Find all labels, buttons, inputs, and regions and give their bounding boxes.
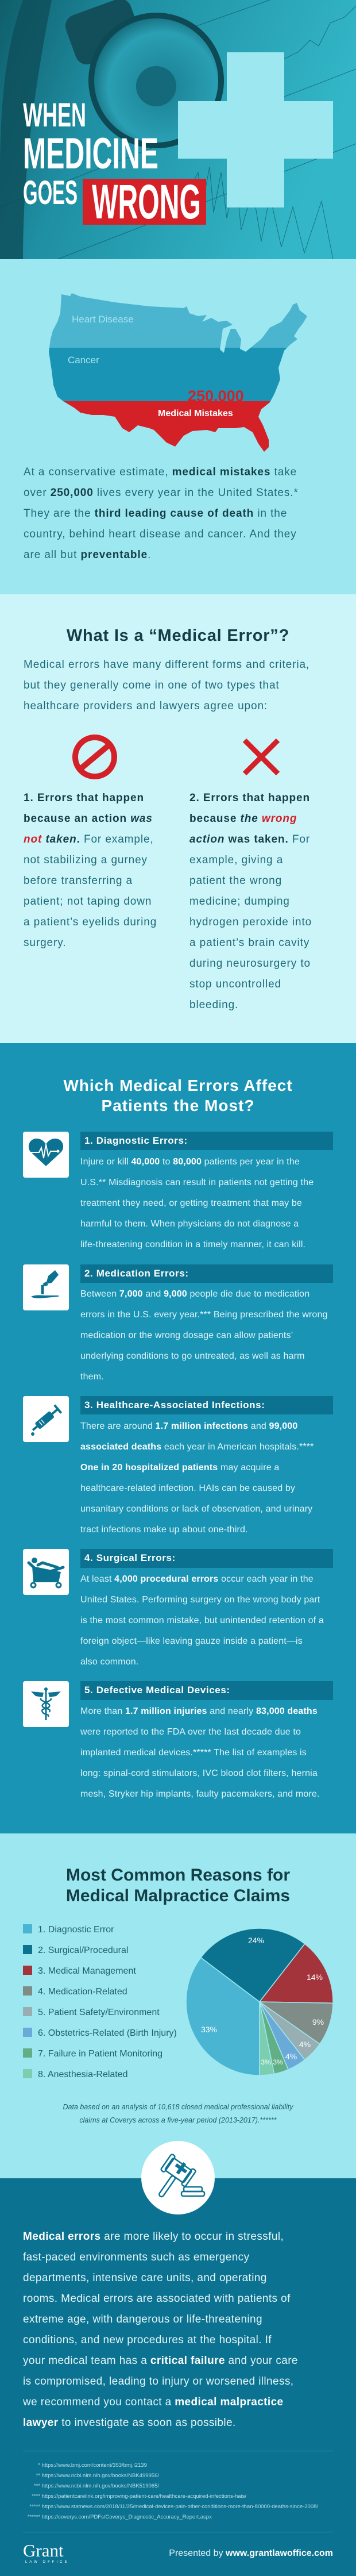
pie chart: 24% [248,1936,264,1945]
text [80,1706,320,1799]
caption: claims at Coverys across a five-year period (2013-2017).****** [79,2116,277,2124]
title: GOES [23,174,78,212]
text block: type 1: 1. Errors that happen [24,792,144,804]
text block: type 2: patient the wrong [189,875,282,887]
text [80,1574,324,1667]
text: errors in the U.S. every year.*** Being prescribed the wrong [80,1310,328,1320]
header bar: 2. Medication Errors: [84,1268,189,1279]
pie chart: 14% [307,1973,323,1982]
icon: gavel circle [141,2141,215,2214]
icon: medical cross [178,52,333,207]
text block: conclusion: fast-paced environments such as emergency [23,2251,249,2263]
legend: 7. Failure in Patient Monitoring [38,2049,162,2059]
footnotes: https://www.ncbi.nlm.nih.gov/books/NBK519065/ [42,2483,159,2489]
text: also common. [80,1657,138,1667]
heading [63,1076,293,1114]
caption [63,2103,293,2124]
legend: 8. Anesthesia-Related [38,2070,128,2079]
header bar [80,1681,333,1700]
text block: type 1: patient; not taping down [24,895,152,908]
footnotes: ***** [30,2504,40,2510]
legend: 1. Diagnostic Error [38,1925,114,1935]
panel: malpractice claims [0,1833,356,2178]
heading: What Is a “Medical Error”? [67,626,289,645]
title [23,101,206,225]
header bar [80,1396,333,1414]
text: life-threatening condition in a timely manner, it can kill. [80,1240,305,1249]
item 2: medication errors [23,1264,333,1382]
text: More than 1.7 million injuries and nearly 83,000 deaths [80,1706,318,1716]
panel: map section background [0,259,356,594]
text block: intro statistic: are all but preventable. [24,549,151,561]
text block: conclusion: rooms. Medical errors are associated with patients of [23,2293,291,2305]
text block: type 1: not stabilizing a gurney [24,854,148,866]
heading: Most Common Reasons for [66,1866,290,1885]
text block: conclusion [23,2231,298,2429]
text: unsanitary conditions or lack of observation, and urinary [80,1504,312,1514]
text block: intro: but they generally come in one of two types that [24,679,280,691]
text: harmful to them. When physicians do not diagnose a [80,1219,299,1229]
text block: intro statistic [24,466,299,561]
footnotes: https://patientcarelink.org/improving-patient-care/healthcare-acquired-infections-hais/ [42,2493,246,2500]
text block: conclusion: we recommend you contact a medical malpractice [23,2396,284,2408]
text: is the most common mistake, but unintended retention of a [80,1616,324,1625]
pie chart [186,1929,333,2075]
text: U.S.** Misdiagnosis can result in patients not getting the [80,1178,314,1187]
text block: conclusion: extreme age, with dangerous or life-threatening [23,2313,262,2325]
text: medication or the wrong dosage can allow patients’ [80,1331,293,1340]
map: US causes of death: Medical Mistakes [158,409,233,418]
text block: type 1: a patient’s eyelids during [24,916,157,928]
item 5: defective medical devices [23,1681,333,1799]
footer credit: Presented by www.grantlawoffice.com [169,2548,333,2558]
text: At least 4,000 procedural errors occur each year in the [80,1574,314,1584]
icon: prohibition sign [72,735,117,779]
icon: bottle pouring [23,1264,69,1310]
pie chart: 33% [201,2025,217,2034]
panel: what is a medical error [0,594,356,1043]
text block: type 2: because the wrong [189,813,297,825]
text block: conclusion: lawyer to investigate as soon as possible. [23,2417,236,2429]
text: underlying conditions to go untreated, as well as harm [80,1351,305,1361]
text: Between 7,000 and 9,000 people die due to medication [80,1289,309,1299]
text block: intro: Medical errors have many different forms and criteria, [24,659,309,671]
text: them. [80,1372,104,1382]
text block: intro statistic: At a conservative estimate, medical mistakes take [24,466,297,478]
text block: type 2: medicine; dumping [189,895,290,908]
pie chart: 4% [285,2052,297,2061]
text [80,1289,328,1382]
text block: type 1: before transferring a [24,875,133,887]
text block: type 1: not taken. For example, [24,833,154,845]
text block: type 2 [189,792,312,1011]
footnotes: ** [36,2473,40,2479]
footnotes: **** [32,2493,40,2500]
footnotes: https://www.ncbi.nlm.nih.gov/books/NBK499956/ [42,2473,159,2479]
text: healthcare-related infection. HAIs can be caused by [80,1483,295,1493]
text block: intro [24,659,309,712]
text block: conclusion: is compromised, leading to injury or worsened illness, [23,2375,293,2387]
icon: red X [242,738,280,776]
legend: 6. Obstetrics-Related (Birth Injury) [38,2028,177,2038]
item 3: healthcare-associated infections [23,1396,333,1535]
text: long: spinal-cord stimulators, IVC blood clot filters, hernia [80,1768,318,1778]
text: Injure or kill 40,000 to 80,000 patients per year in the [80,1157,300,1167]
icon: syringe [23,1396,69,1442]
map: US causes of death: Heart Disease [72,314,134,325]
item 1: diagnostic errors [23,1132,333,1249]
footnotes: https://coverys.com/PDFs/Coverys_Diagnostic_Accuracy_Report.aspx [42,2514,212,2520]
text block: type 2: a patient’s brain cavity [189,937,309,949]
text: treatment they need, or getting treatment that may be [80,1198,302,1208]
text [80,1421,314,1535]
text block: type 2: hydrogen peroxide into [189,916,312,928]
text block: type 2: bleeding. [189,999,238,1011]
text block: type 1: surgery. [24,937,66,949]
legend: 5. Patient Safety/Environment [38,2008,160,2017]
header bar: 5. Defective Medical Devices: [84,1685,230,1695]
heading: Medical Malpractice Claims [66,1886,290,1905]
text block: intro statistic: country, behind heart disease and cancer. And they [24,528,297,540]
text: implanted medical devices.***** The list of examples is [80,1748,307,1758]
panel: which medical errors affect patients most [0,1043,356,1833]
pie chart: 3% [261,2058,271,2066]
pie chart: 9% [312,2017,324,2027]
icon: heart with pulse [23,1132,69,1178]
icon: caduceus [23,1681,69,1727]
text block: intro: healthcare providers and lawyers agree upon: [24,700,268,712]
footnotes: https://www.bmj.com/content/353/bmj.i2139 [42,2462,147,2469]
footnotes: https://www.statnews.com/2018/11/25/medical-devices-pain-other-conditions-more-than-80000-deaths-since-2008/ [42,2504,318,2510]
header bar: 1. Diagnostic Errors: [84,1135,188,1146]
pie chart: 4% [299,2040,311,2049]
map: US causes of death [49,293,307,452]
text: There are around 1.7 million infections and 99,000 [80,1421,297,1431]
text block: conclusion: your medical team has a critical failure and your care [23,2355,298,2367]
header: photo banner with title [0,0,356,259]
text block: intro statistic: over 250,000 lives every year in the United States.* [24,487,299,499]
header bar [80,1132,333,1150]
map: US causes of death: Cancer [68,355,99,366]
text block: conclusion: departments, intensive care units, and operating [23,2272,267,2284]
heading: Patients the Most? [102,1097,254,1114]
text: associated deaths each year in American hospitals.**** [80,1442,314,1452]
text block: conclusion: Medical errors are more likely to occur in stressful, [23,2231,284,2243]
header bar: 4. Surgical Errors: [84,1552,176,1563]
map: US causes of death: 250,000 [188,387,244,405]
text block: type 2: action was taken. For [189,833,310,845]
text: One in 20 hospitalized patients may acquire a [80,1463,279,1472]
header bar [80,1549,333,1568]
item 4: surgical errors [23,1549,333,1667]
heading: Which Medical Errors Affect [63,1076,293,1094]
header bar: 3. Healthcare-Associated Infections: [84,1400,265,1410]
header bar [80,1264,333,1283]
text block: type 1: because an action was [24,813,153,825]
text block: conclusion: conditions, and new procedures at the hospital. If [23,2334,272,2346]
footnotes: *** [34,2483,40,2489]
footnotes [28,2462,318,2520]
legend: 3. Medical Management [38,1966,136,1976]
legend [23,1924,177,2079]
legend: 2. Surgical/Procedural [38,1946,128,1955]
text: United States. Performing surgery on the wrong body part [80,1595,320,1605]
footnotes: * [38,2462,40,2469]
text block: type 2: example, giving a [189,854,283,866]
heading [66,1866,290,1905]
legend: 4. Medication-Related [38,1987,127,1997]
caption: Data based on an analysis of 10,618 closed medical professional liability [63,2103,293,2111]
text: were reported to the FDA over the last decade due to [80,1727,301,1737]
text [80,1157,314,1249]
icon: patient on stretcher [23,1549,69,1595]
text block: intro statistic: They are the third leading cause of death in the [24,507,287,520]
text: tract infections make up about one-third. [80,1525,248,1535]
pie chart: 3% [273,2058,283,2066]
logo: Grant Law Office: LAW OFFICE [25,2560,69,2564]
text block: type 1 [24,792,157,949]
text block: type 2: 2. Errors that happen [189,792,310,804]
text: mesh, Stryker hip implants, faulty pacemakers, and more. [80,1789,320,1799]
text block: type 2: stop uncontrolled [189,978,281,990]
text: foreign object—like leaving gauze inside a patient—is [80,1636,303,1646]
logo: Grant Law Office: Grant [23,2540,64,2560]
text block: type 2: during neurosurgery to [189,958,311,970]
footnotes: ****** [28,2514,40,2520]
